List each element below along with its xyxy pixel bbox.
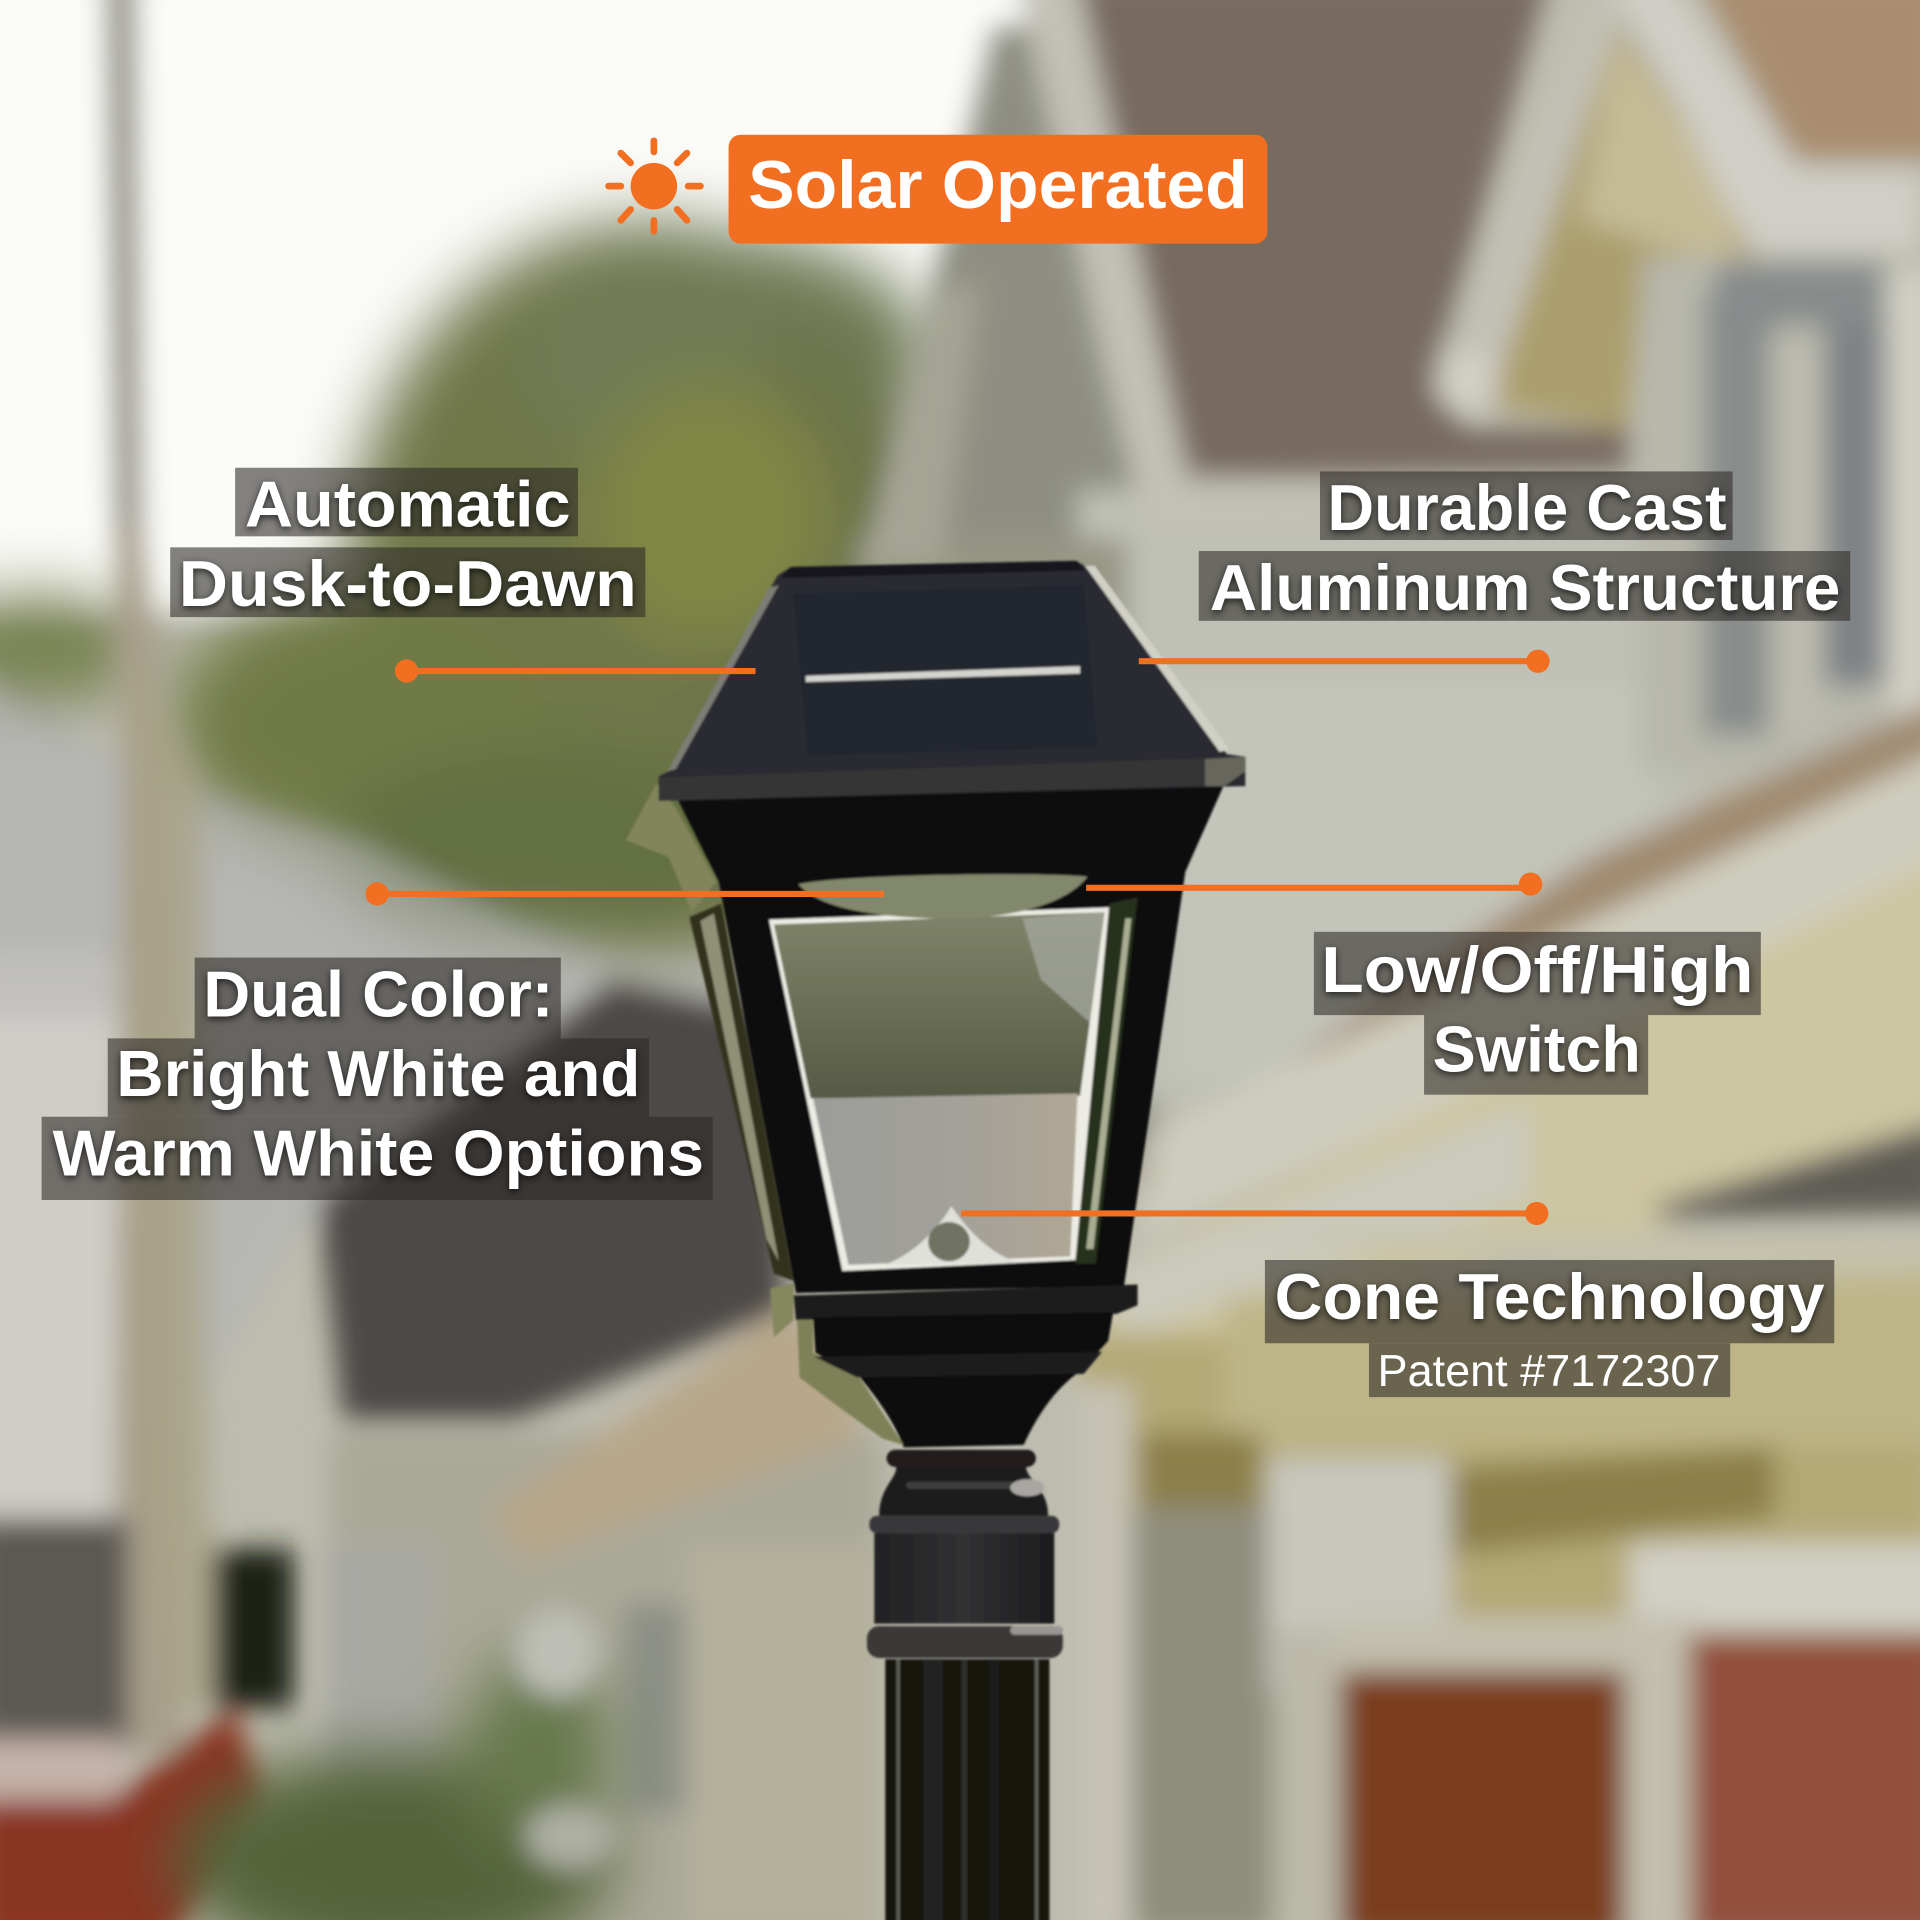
callout: Low/Off/High Switch: Low/Off/High xyxy=(1321,933,1753,1006)
gable xyxy=(1482,24,1763,429)
bushes xyxy=(171,1653,612,1920)
callout: Dual Color options xyxy=(42,957,713,1200)
house centre wall xyxy=(857,24,1200,1224)
lower right roof brown xyxy=(1139,698,1920,1200)
dark roof left xyxy=(318,980,784,1420)
lower left house xyxy=(0,1518,129,1751)
white frame xyxy=(1267,1457,1451,1690)
lantern roof xyxy=(659,561,1245,801)
left house siding and roof xyxy=(0,624,784,1531)
cone xyxy=(884,1206,1019,1265)
leader line: Cone Technology xyxy=(961,1202,1548,1225)
white trim along roof left xyxy=(1016,0,1322,527)
porch post xyxy=(1078,1384,1133,1920)
white awning xyxy=(1629,1543,1920,1631)
lantern xyxy=(626,561,1245,1920)
soffit cream xyxy=(1102,857,1920,1396)
callout: Cone Technology: Patent #7172307 xyxy=(1378,1347,1720,1396)
callout: Dual Color options: Dual Color: xyxy=(203,957,553,1030)
lantern front glass xyxy=(769,907,1109,1271)
callout: Dual Color options: Bright White and xyxy=(116,1037,640,1110)
callout: Cone Technology xyxy=(1265,1260,1834,1397)
lantern base xyxy=(770,1283,1138,1447)
callout: Durable Cast Aluminum Structure xyxy=(1199,471,1850,624)
lantern frame xyxy=(676,784,1224,1293)
callout: Cone Technology: Cone Technology xyxy=(1275,1260,1824,1333)
tree mass xyxy=(0,220,955,955)
icon: sun xyxy=(609,141,700,231)
callout: Low/Off/High Switch: Switch xyxy=(1433,1012,1641,1085)
callout: Automatic Dusk-to-Dawn: Dusk-to-Dawn xyxy=(179,547,637,620)
leader line: Automatic Dusk-to-Dawn xyxy=(395,659,756,683)
lantern top dome xyxy=(798,874,1087,919)
callout: Durable Cast Aluminum Structure: Aluminum Structure xyxy=(1210,551,1840,624)
lantern right side strip xyxy=(1075,898,1138,1264)
lantern side glass left xyxy=(689,904,793,1281)
brown upper roof xyxy=(1071,0,1629,478)
callout: Low/Off/High Switch xyxy=(1314,932,1761,1095)
fascia white band xyxy=(1139,747,1920,1237)
leader line: Low/Off/High Switch xyxy=(1086,872,1542,896)
callout: Automatic Dusk-to-Dawn: Automatic xyxy=(245,468,571,541)
porch roof centre xyxy=(490,1310,857,1561)
callout: Dual Color options: Warm White Options xyxy=(53,1117,704,1190)
window left xyxy=(1133,1506,1273,1920)
right side window xyxy=(1641,257,1920,771)
heading badge: Solar Operated: Solar Operated xyxy=(748,148,1248,223)
post neck rings xyxy=(867,1450,1063,1658)
callout: Durable Cast Aluminum Structure: Durable Cast xyxy=(1327,471,1727,544)
leader line: Durable Cast xyxy=(1139,650,1550,673)
centre lower house xyxy=(331,1433,882,1920)
utility pole xyxy=(104,0,184,1751)
dark soffit shadow xyxy=(1653,1120,1920,1218)
callout: Automatic Dusk-to-Dawn xyxy=(170,468,645,620)
door and brick xyxy=(1341,1671,1625,1920)
lantern left tab xyxy=(626,784,716,912)
leader line: Dual Color xyxy=(366,882,884,906)
fluted post xyxy=(885,1659,1049,1920)
sky xyxy=(0,0,1029,612)
porch ceiling xyxy=(1078,1335,1920,1920)
heading badge: Solar Operated xyxy=(729,135,1267,244)
